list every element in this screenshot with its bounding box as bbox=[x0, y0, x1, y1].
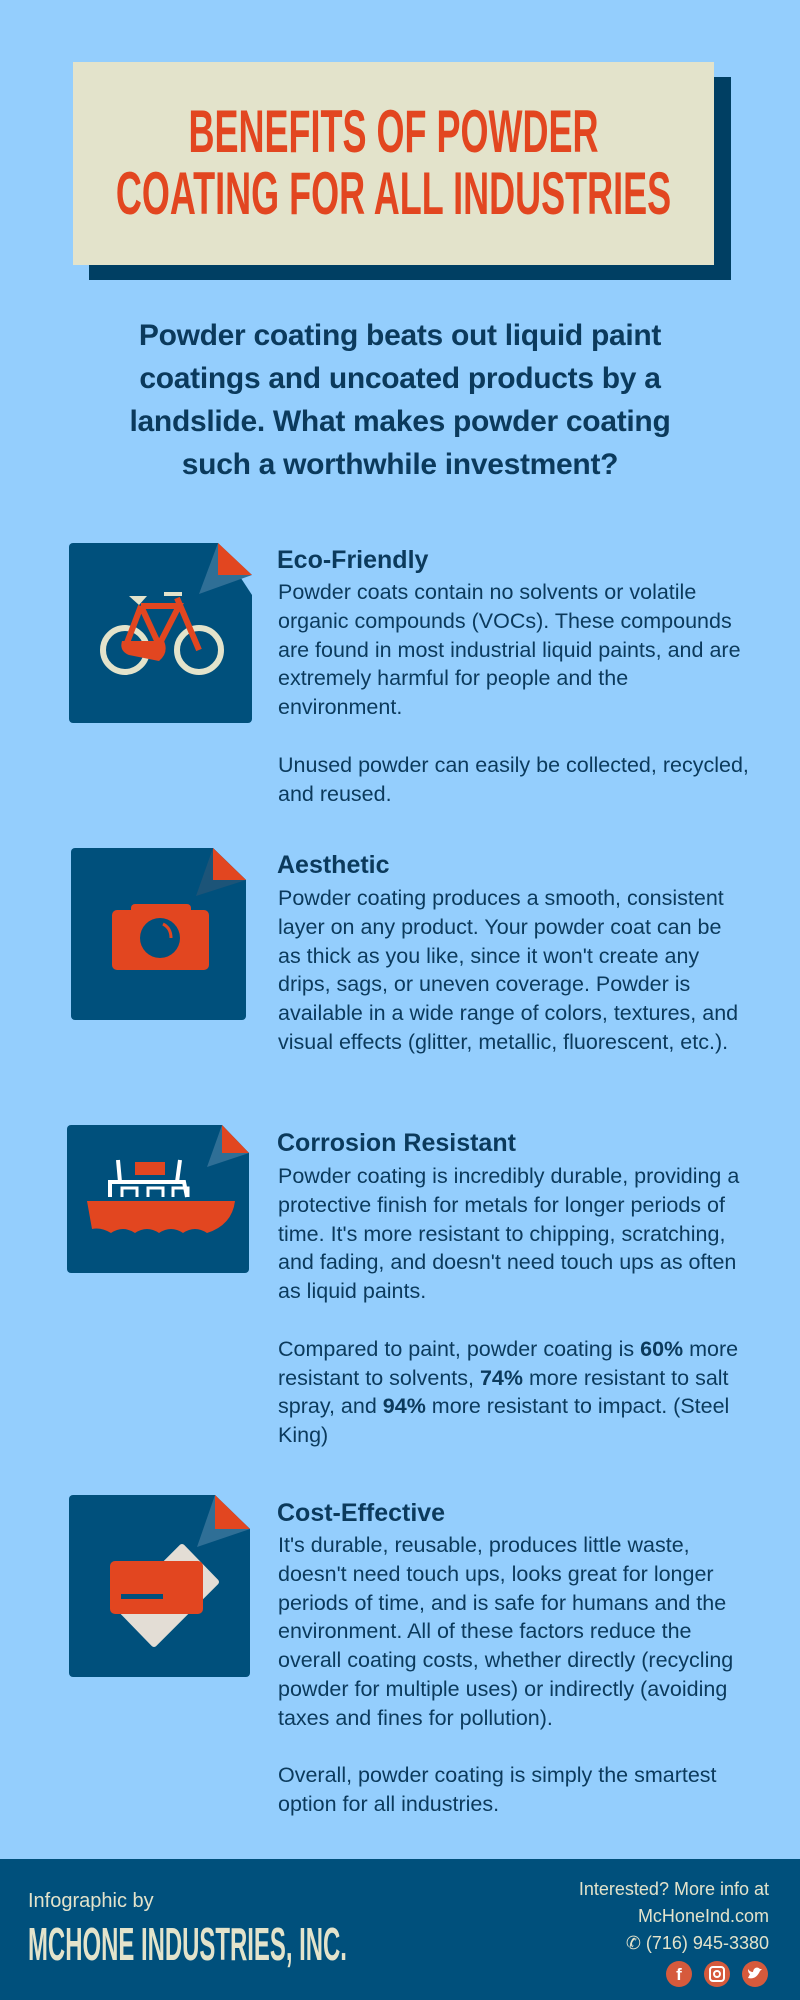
text: aesthetic: visual effects (glitter, metallic, fluorescent, etc.). bbox=[278, 1030, 728, 1054]
footer: contact: ✆ (716) 945-3380 bbox=[626, 1933, 769, 1953]
footer: social icons: f bbox=[676, 1965, 682, 1984]
title text: BENEFITS OF POWDER bbox=[188, 98, 599, 165]
text: eco-friendly: Unused powder can easily be collected, recycled, bbox=[278, 753, 749, 777]
footer: contact: McHoneInd.com bbox=[638, 1906, 769, 1926]
text: aesthetic: Powder coating produces a smooth, consistent bbox=[278, 886, 724, 910]
text: aesthetic: drips, sags, or uneven coverage. Powder is bbox=[278, 972, 690, 996]
text: aesthetic: as thick as you like, since it won't create any bbox=[278, 944, 699, 968]
text: cost-effective: powder for multiple uses) or indirectly (avoiding bbox=[278, 1677, 727, 1701]
footer: contact bbox=[579, 1879, 769, 1953]
text: cost-effective: periods of time, and is safe for humans and the bbox=[278, 1591, 726, 1615]
footer: company name: MCHONE INDUSTRIES, INC. bbox=[28, 1918, 347, 1970]
intro text: such a worthwhile investment? bbox=[182, 448, 618, 481]
intro text bbox=[130, 319, 670, 481]
text: aesthetic bbox=[278, 886, 738, 1054]
title box bbox=[73, 62, 714, 265]
text: corrosion: King) bbox=[278, 1423, 328, 1447]
intro text: landslide. What makes powder coating bbox=[130, 405, 670, 438]
text: corrosion: as liquid paints. bbox=[278, 1279, 426, 1303]
intro text: coatings and uncoated products by a bbox=[139, 362, 661, 395]
title text: COATING FOR ALL INDUSTRIES bbox=[116, 160, 671, 227]
text: aesthetic: layer on any product. Your powder coat can be bbox=[278, 915, 721, 939]
intro text: Powder coating beats out liquid paint bbox=[139, 319, 661, 352]
footer: social icons bbox=[666, 1961, 768, 1987]
text: cost-effective: It's durable, reusable, produces little waste, bbox=[278, 1533, 690, 1557]
text: cost-effective bbox=[278, 1533, 733, 1816]
title shadow bbox=[89, 77, 731, 280]
heading: Eco-Friendly: Eco-Friendly bbox=[277, 546, 428, 574]
text: eco-friendly: Powder coats contain no solvents or volatile bbox=[278, 580, 696, 604]
text: eco-friendly: extremely harmful for people and the bbox=[278, 666, 628, 690]
text: corrosion: time. It's more resistant to chipping, scratching, bbox=[278, 1222, 725, 1246]
text: corrosion bbox=[278, 1164, 740, 1447]
text: eco-friendly: and reused. bbox=[278, 782, 392, 806]
icon: ship bbox=[67, 1125, 249, 1273]
text: eco-friendly: organic compounds (VOCs). These compounds bbox=[278, 609, 732, 633]
text: aesthetic: available in a wide range of colors, textures, and bbox=[278, 1001, 738, 1025]
text: eco-friendly bbox=[278, 580, 749, 806]
text: eco-friendly: are found in most industrial liquid paints, and are bbox=[278, 638, 741, 662]
text: corrosion: resistant to solvents, 74% more resistant to salt bbox=[278, 1366, 729, 1390]
text: cost-effective: doesn't need touch ups, looks great for longer bbox=[278, 1562, 714, 1586]
text: corrosion: protective finish for metals for longer periods of bbox=[278, 1193, 725, 1217]
heading: Corrosion Resistant: Corrosion Resistant bbox=[277, 1129, 516, 1157]
text: corrosion: Compared to paint, powder coating is 60% more bbox=[278, 1337, 738, 1361]
text: corrosion: and fading, and doesn't need touch ups as often bbox=[278, 1250, 736, 1274]
text: cost-effective: environment. All of these factors reduce the bbox=[278, 1619, 692, 1643]
text: cost-effective: option for all industries. bbox=[278, 1792, 499, 1816]
icon: bicycle bbox=[69, 543, 252, 723]
title text bbox=[116, 98, 671, 227]
footer bbox=[0, 1859, 800, 2000]
text: cost-effective: overall coating costs, whether directly (recycling bbox=[278, 1648, 733, 1672]
icon: credit card bbox=[69, 1495, 250, 1677]
text: cost-effective: Overall, powder coating is simply the smartest bbox=[278, 1763, 717, 1787]
text: cost-effective: taxes and fines for pollution). bbox=[278, 1706, 553, 1730]
text: corrosion: spray, and 94% more resistant to impact. (Steel bbox=[278, 1394, 729, 1418]
footer: credit: Infographic by bbox=[28, 1890, 154, 1912]
footer: contact: Interested? More info at bbox=[579, 1879, 769, 1899]
icon: camera bbox=[71, 848, 246, 1020]
heading: Aesthetic: Aesthetic bbox=[277, 851, 390, 879]
text: eco-friendly: environment. bbox=[278, 695, 402, 719]
text: corrosion: Powder coating is incredibly durable, providing a bbox=[278, 1164, 739, 1188]
heading: Cost-Effective: Cost-Effective bbox=[277, 1499, 445, 1527]
